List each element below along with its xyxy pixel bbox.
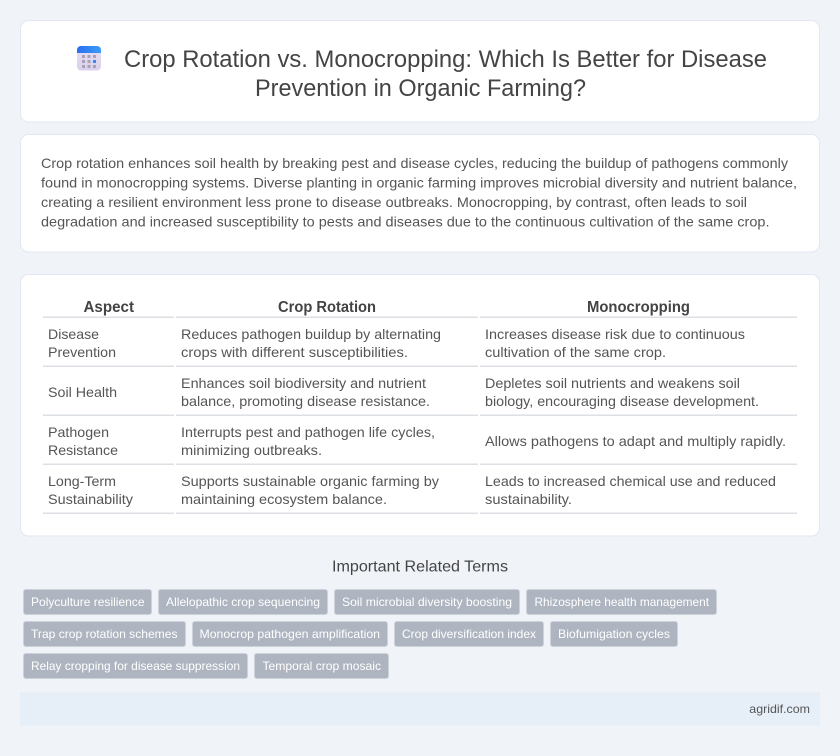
footer [20, 692, 820, 726]
tag [24, 654, 248, 678]
tag: Temporal crop mosaic [262, 659, 381, 673]
tag [192, 622, 388, 646]
table row: long-term sustainability: Long-Term [48, 473, 116, 489]
table row: long-term sustainability: Sustainability [48, 491, 133, 507]
table row: pathogen resistance: Resistance [48, 442, 118, 458]
table row: pathogen resistance [43, 424, 797, 465]
table header row [43, 299, 797, 318]
heading: title text: Crop Rotation vs. Monocropping: Which Is Better for Disease [124, 46, 767, 73]
table row: disease prevention: Increases disease risk due to continuous [485, 326, 745, 342]
table row: pathogen resistance: Pathogen [48, 424, 109, 440]
tag [550, 622, 678, 646]
tag: Soil microbial diversity boosting [342, 595, 512, 609]
tag [334, 590, 520, 614]
panel: introduction [20, 134, 820, 252]
table header row: Monocropping [587, 299, 690, 316]
table row: long-term sustainability: Leads to increased chemical use and reduced [485, 473, 776, 489]
tag [158, 590, 328, 614]
table row: pathogen resistance: Allows pathogens to adapt and multiply rapidly. [485, 433, 786, 449]
table header row: Crop Rotation [278, 299, 376, 316]
table row: disease prevention [43, 326, 797, 367]
heading: important related terms: Important Related Terms [332, 558, 508, 576]
tag: Monocrop pathogen amplification [200, 627, 380, 641]
table row: soil health: biology, encouraging disease development. [485, 393, 759, 409]
tag: Crop diversification index [402, 627, 536, 641]
text block: introduction paragraph [41, 155, 797, 230]
text block: introduction paragraph: Crop rotation enhances soil health by breaking pest and disease cycles, reducing the buildup of pathogens commonly [41, 155, 788, 171]
table row: disease prevention: cultivation of the same crop. [485, 344, 666, 360]
tag list: related terms [24, 590, 716, 678]
text block: introduction paragraph: creating a resilient environment less prone to disease outbreaks. Monocropping, by contrast, often leads to soil [41, 194, 747, 210]
panel: comparison table [20, 274, 820, 536]
tag: Polyculture resilience [31, 595, 145, 609]
tag [394, 622, 544, 646]
tag: Rhizosphere health management [534, 595, 710, 609]
table row: long-term sustainability: maintaining ecosystem balance. [181, 491, 387, 507]
table row: disease prevention: Prevention [48, 344, 116, 360]
table row: disease prevention: crops with different susceptibilities. [181, 344, 408, 360]
table row: long-term sustainability: Supports sustainable organic farming by [181, 473, 439, 489]
text block: introduction paragraph: found in monocropping systems. Diverse planting in organic farming improves microbial diversity and nutrient balance, [41, 174, 797, 190]
table row: soil health [43, 375, 797, 416]
panel: title [20, 20, 820, 122]
tag [24, 590, 152, 614]
table row: long-term sustainability [43, 473, 797, 514]
tag: Allelopathic crop sequencing [166, 595, 320, 609]
table row: pathogen resistance: minimizing outbreaks. [181, 442, 322, 458]
table row: soil health: Enhances soil biodiversity and nutrient [181, 375, 426, 391]
table row: pathogen resistance: Interrupts pest and pathogen life cycles, [181, 424, 435, 440]
table row: soil health: Depletes soil nutrients and weakens soil [485, 375, 740, 391]
icon: calendar [77, 46, 101, 70]
table header row: Aspect [84, 299, 135, 316]
text block: introduction paragraph: degradation and increased susceptibility to pests and diseases due to the continuous cultivation of the same crop. [41, 214, 770, 230]
tag: Relay cropping for disease suppression [31, 659, 240, 673]
heading: title text [124, 46, 767, 102]
tag: Biofumigation cycles [558, 627, 670, 641]
tag [526, 590, 716, 614]
tag [254, 654, 388, 678]
heading: title text: Prevention in Organic Farming? [255, 75, 586, 102]
table row: soil health: Soil Health [48, 384, 117, 400]
table row: soil health: balance, promoting disease resistance. [181, 393, 430, 409]
table row: disease prevention: Disease [48, 326, 99, 342]
table row: disease prevention: Reduces pathogen buildup by alternating [181, 326, 441, 342]
tag: Trap crop rotation schemes [31, 627, 178, 641]
tag [24, 622, 186, 646]
table row: long-term sustainability: sustainability. [485, 491, 572, 507]
footer: agridif.com [749, 702, 810, 716]
